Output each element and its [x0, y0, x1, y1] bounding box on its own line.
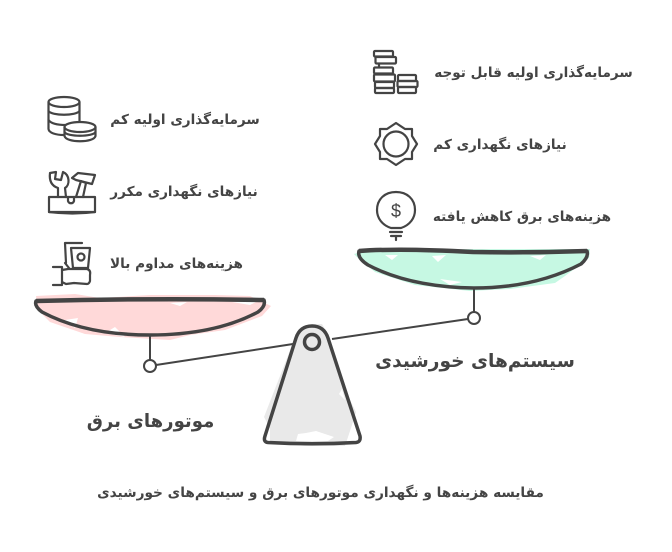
text: low initial investment: سرمایه‌گذاری اولیه کم [110, 111, 260, 128]
heading: electric motors: موتورهای برق [87, 411, 214, 432]
icon label: dollar sign: $ [391, 201, 401, 221]
icon: sun badge low maintenance [375, 123, 417, 165]
fulcrum [264, 324, 360, 446]
icon: coins low investment [48, 97, 96, 141]
text: low maintenance needs: نیازهای نگهداری کم [433, 136, 567, 153]
text: reduced electricity costs: هزینه‌های برق کاهش یافته [433, 209, 611, 225]
text: high ongoing costs: هزینه‌های مداوم بالا [110, 256, 243, 272]
icon: toolbox recurring maintenance [49, 172, 95, 214]
heading: solar systems: سیستم‌های خورشیدی [375, 351, 575, 372]
text: considerable initial investment: سرمایه‌گذاری اولیه قابل توجه [434, 64, 633, 81]
icon: lightbulb with dollar [377, 192, 415, 240]
icon: coin stacks large investment [374, 51, 418, 93]
caption: مقایسه هزینه‌ها و نگهداری موتورهای برق و سیستم‌های خورشیدی [97, 484, 544, 501]
text: recurring maintenance needs: نیازهای نگهداری مکرر [109, 183, 258, 200]
icon: hand holding money [53, 243, 90, 285]
right pan: solar systems [354, 248, 590, 324]
scale beam [156, 319, 468, 365]
left pan: electric motors [36, 294, 271, 372]
